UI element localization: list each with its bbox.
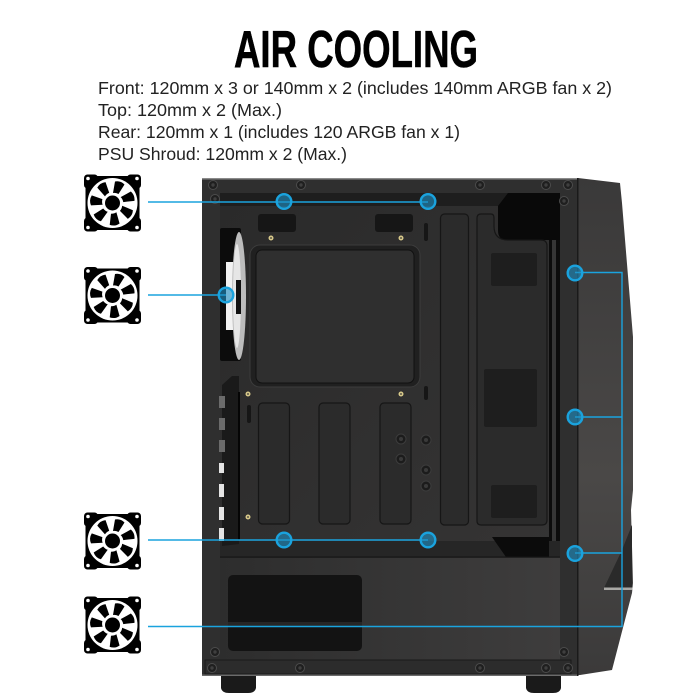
- frame screws: [208, 180, 572, 672]
- lower tray panels: [258, 403, 411, 524]
- top vent: [220, 193, 560, 206]
- right tray panels: [440, 214, 547, 525]
- icon: fan, rear: [84, 267, 141, 324]
- front panel notch: [604, 525, 632, 588]
- front side panel: [578, 178, 633, 675]
- case frame: [202, 178, 578, 676]
- top cable holes: [258, 214, 413, 232]
- icon: fan, PSU shroud: [84, 512, 141, 570]
- rear top opening: [498, 193, 560, 240]
- callout: front fans: [148, 266, 622, 626]
- rear fan: [220, 228, 246, 361]
- specification text: [98, 78, 612, 164]
- title: AIR COOLING: [234, 21, 478, 79]
- spec: front: Front: 120mm x 3 or 140mm x 2 (includes 140mm ARGB fan x 2): [98, 78, 612, 98]
- PSU opening: [228, 575, 362, 651]
- front edge opening: [549, 240, 560, 558]
- PC case: [202, 178, 633, 693]
- PCI expansion slots: [219, 376, 240, 546]
- CPU cutout: [250, 245, 420, 387]
- callout: rear fan: [148, 288, 233, 302]
- back panel: [220, 193, 560, 558]
- callout: PSU shroud fans: [148, 533, 435, 547]
- case feet: [221, 675, 561, 693]
- spec: rear: Rear: 120mm x 1 (includes 120 ARGB fan x 1): [98, 122, 460, 142]
- tray standoff holes: [396, 276, 526, 519]
- PSU shroud: [220, 556, 560, 660]
- bottom frame rail: [205, 660, 571, 674]
- brass standoffs: [246, 236, 404, 520]
- bottom vent: [220, 541, 560, 557]
- callout: top fans: [148, 194, 435, 209]
- small slots: [247, 223, 506, 467]
- icon: fan, top: [84, 174, 141, 232]
- spec: PSU shroud: PSU Shroud: 120mm x 2 (Max.): [98, 144, 347, 164]
- icon: fan, front: [84, 596, 141, 654]
- spec: top: Top: 120mm x 2 (Max.): [98, 100, 282, 120]
